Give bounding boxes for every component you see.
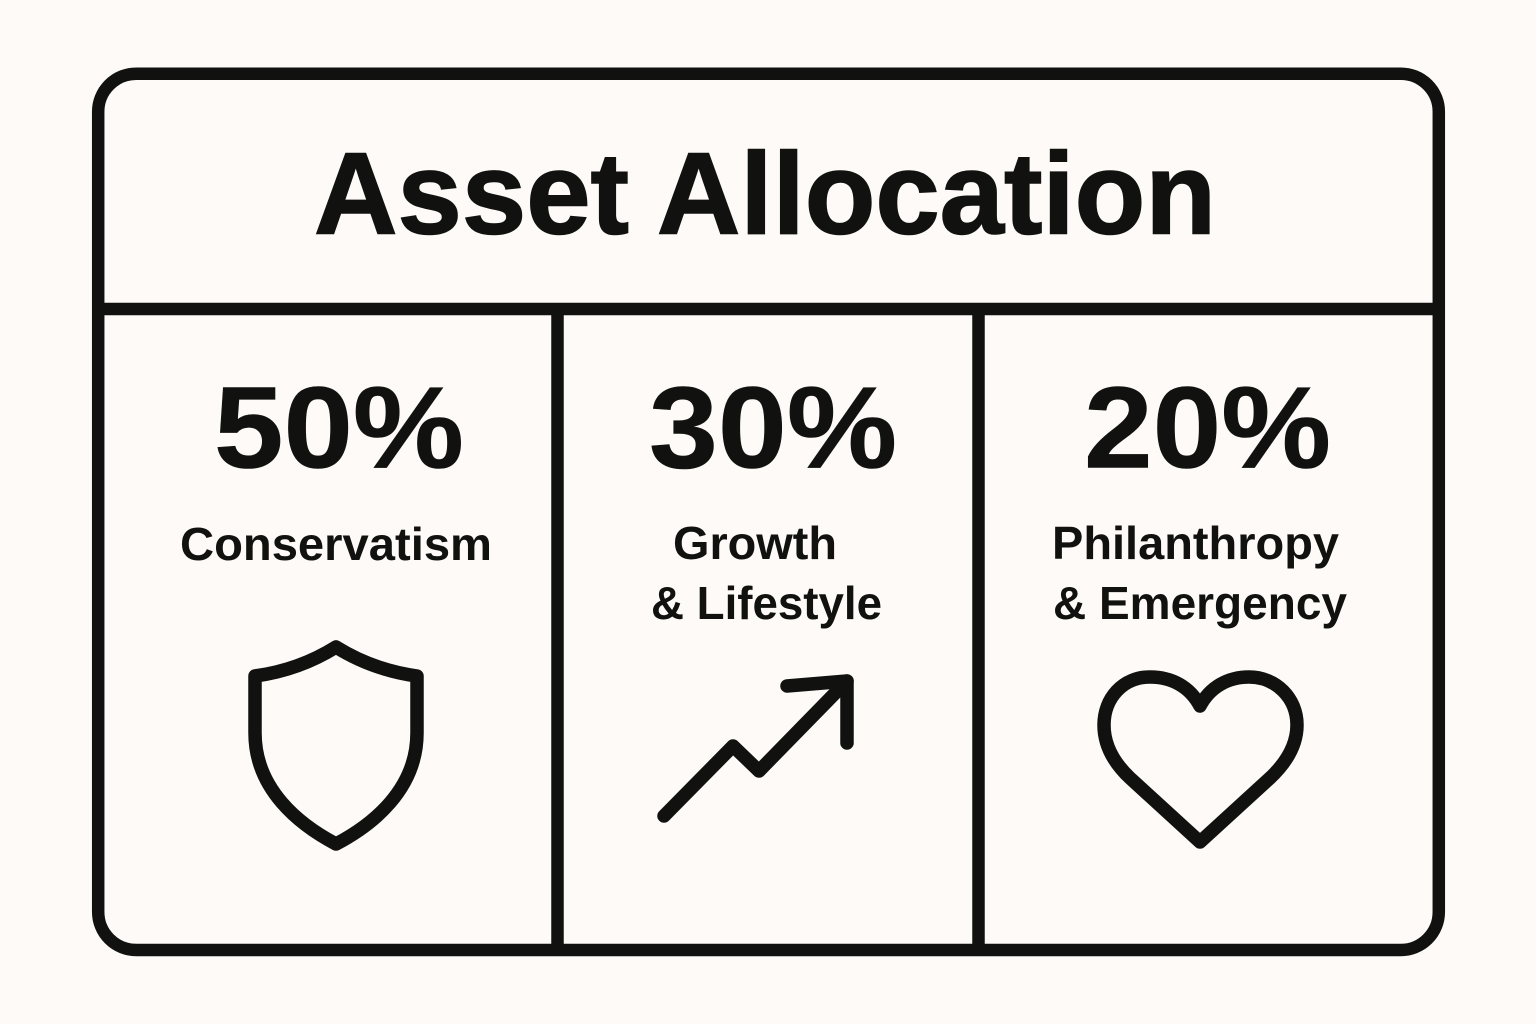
percentage: 50%: 50%: [214, 362, 464, 492]
icon: rising arrow: [664, 681, 847, 816]
panel: philanthropy and emergency: [1052, 362, 1347, 842]
panel: growth and lifestyle: [649, 362, 897, 816]
label: conservatism: Conservatism: [180, 518, 492, 570]
label: growth and lifestyle: Growth: [673, 517, 837, 569]
label: philanthropy and emergency: Philanthropy: [1052, 517, 1339, 569]
percentage: 30%: 30%: [649, 362, 897, 492]
outer frame: [98, 74, 1439, 950]
label: growth and lifestyle: [651, 517, 882, 629]
icon: heart: [1104, 677, 1297, 842]
title: Asset Allocation: [314, 128, 1216, 258]
label: philanthropy and emergency: & Emergency: [1053, 577, 1347, 629]
label: philanthropy and emergency: [1052, 517, 1347, 629]
panel: conservatism: [180, 362, 492, 844]
icon: shield: [255, 647, 417, 844]
label: growth and lifestyle: & Lifestyle: [651, 577, 882, 629]
percentage: 20%: 20%: [1084, 362, 1331, 492]
